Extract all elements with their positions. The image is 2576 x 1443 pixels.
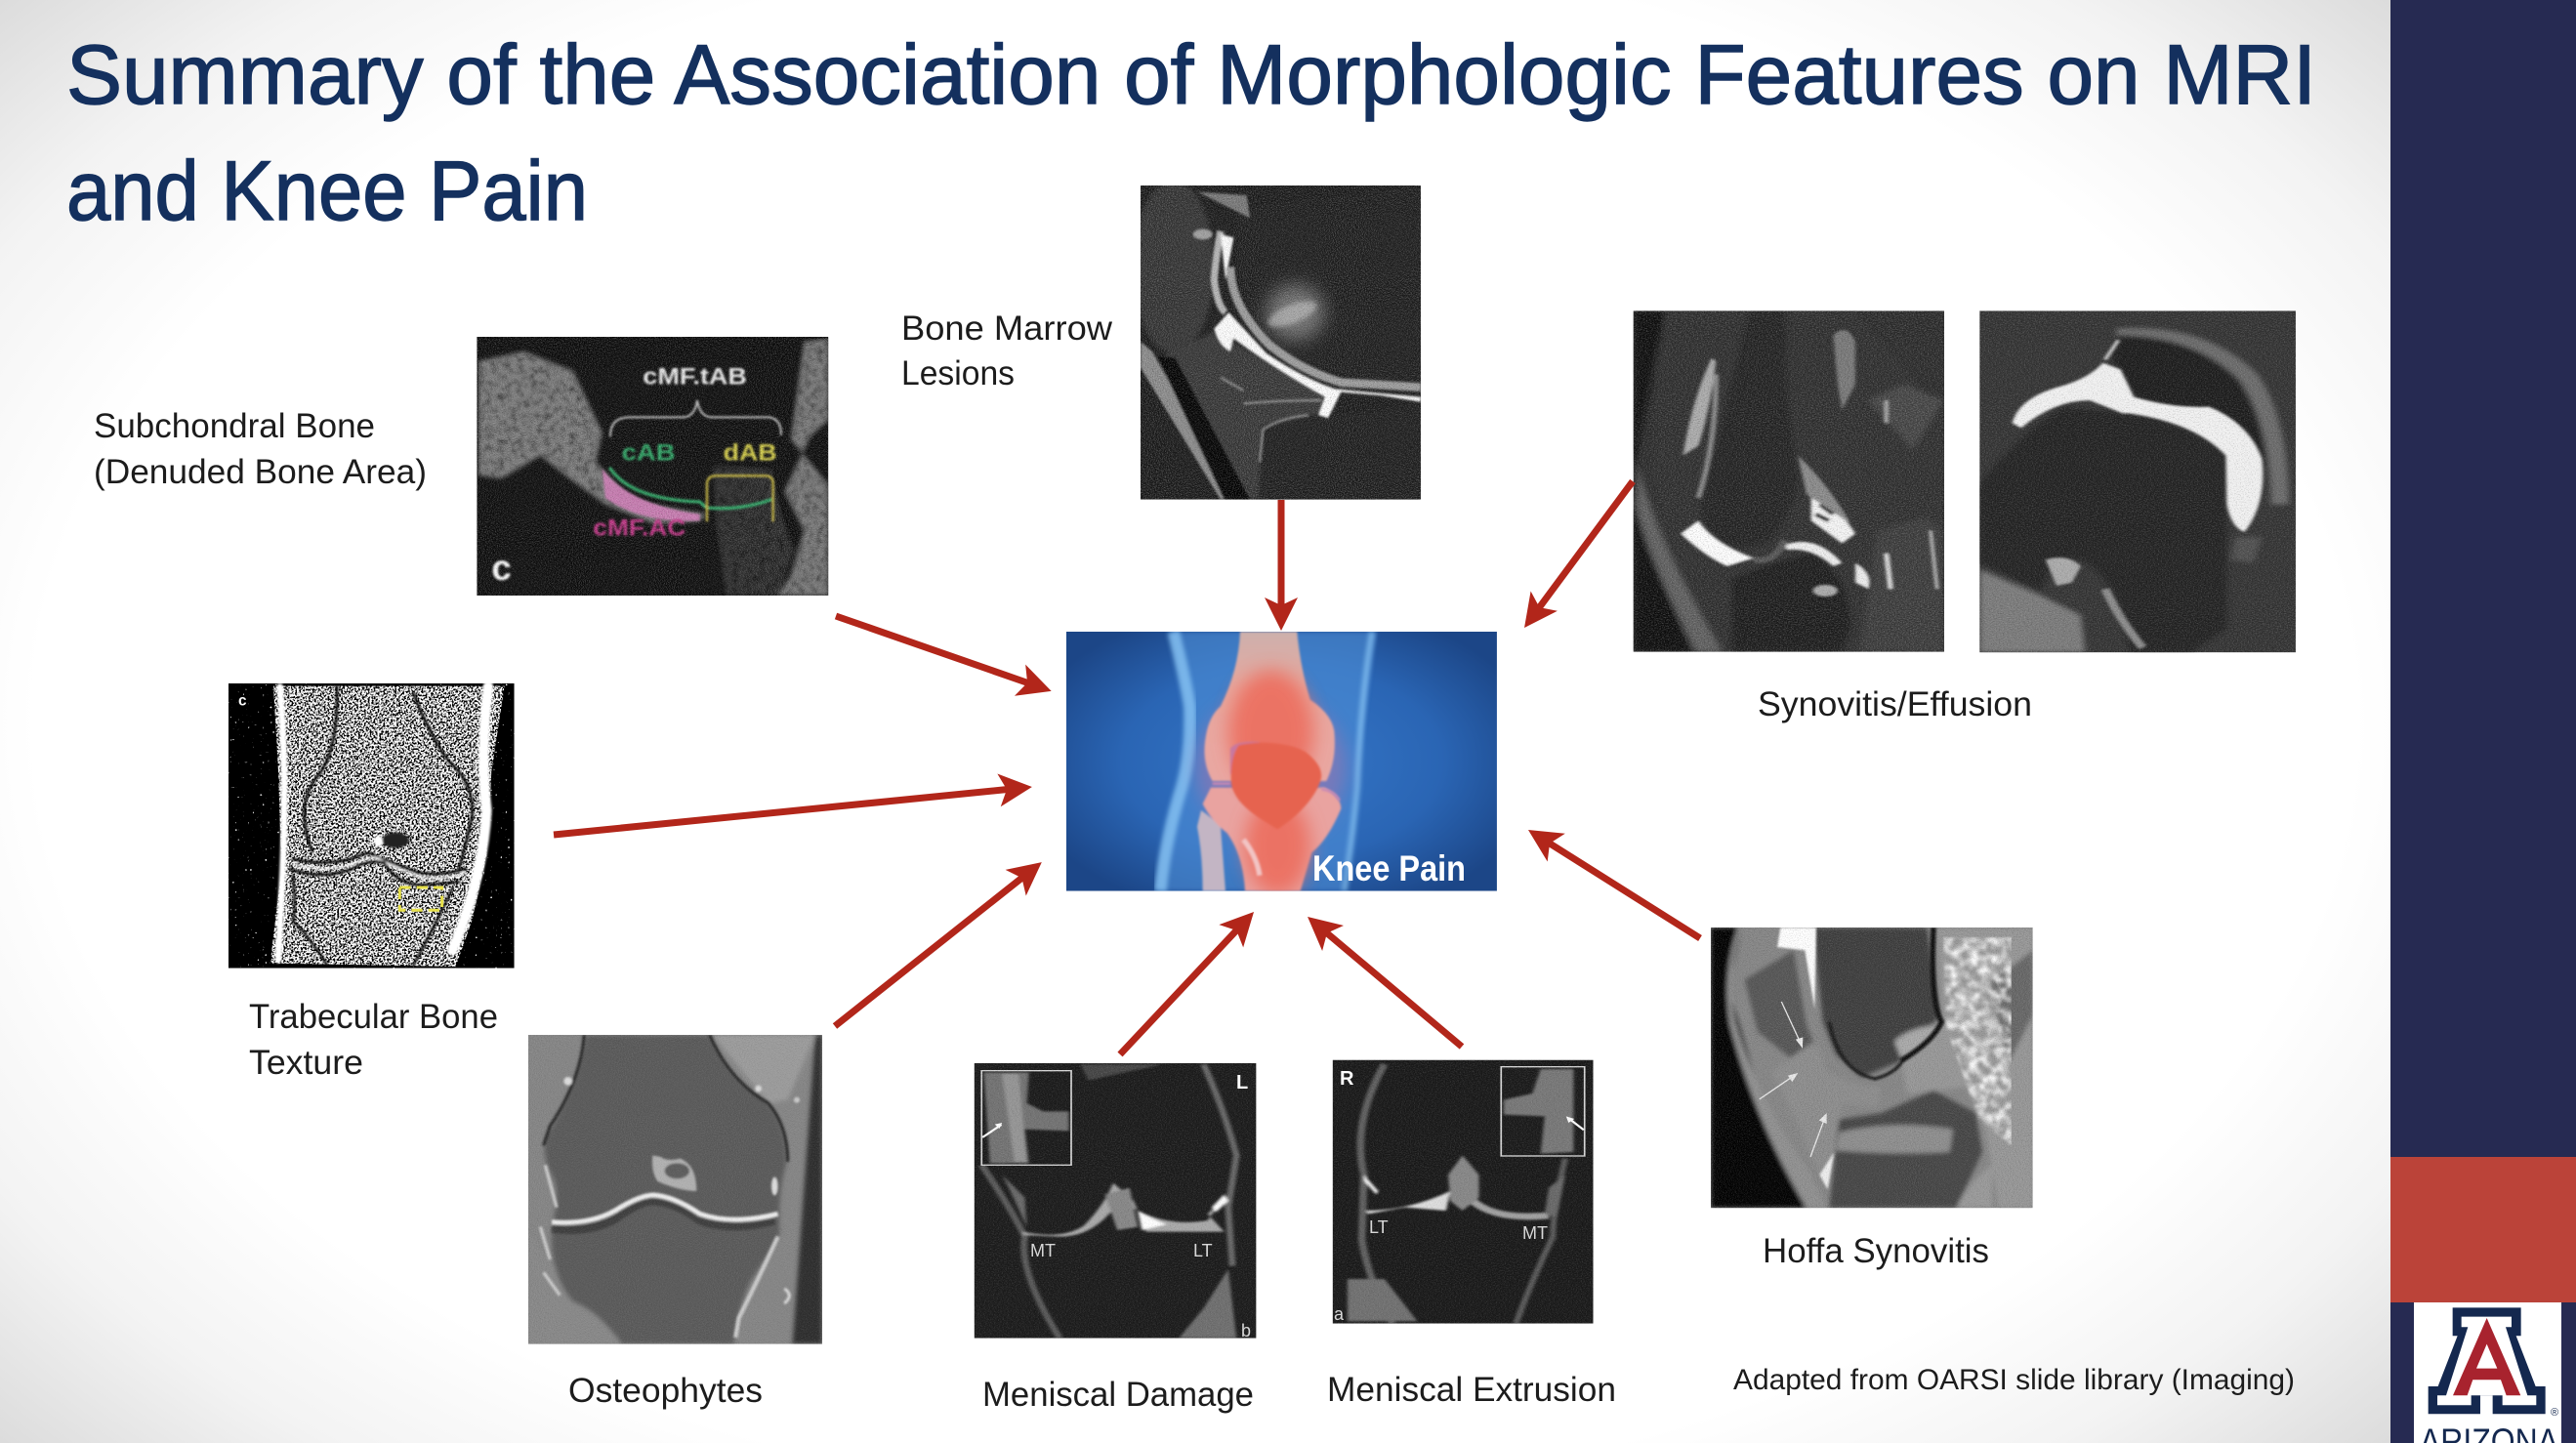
panel: knee pain illustration (1066, 632, 1497, 895)
arrow: trabecular bone to knee pain (554, 770, 1034, 835)
source note: Adapted from OARSI slide library (Imaging) (1733, 1364, 2295, 1396)
panel: meniscal damage MRI: L (1236, 1072, 1248, 1093)
panel: subchondral bone MRI: cMF.tAB (643, 363, 747, 390)
label: trabecular bone texture: Texture (249, 1044, 363, 1082)
panel: meniscal extrusion MRI: R (1340, 1068, 1354, 1090)
label: bone marrow lesions (901, 309, 1113, 392)
arrow: synovitis to knee pain (1511, 481, 1633, 638)
panel: subchondral bone MRI: cAB (622, 440, 676, 467)
arrow: meniscal extrusion to knee pain (1297, 904, 1462, 1047)
panel: bone marrow lesions MRI (1133, 181, 1421, 500)
label: meniscal damage: Meniscal Damage (982, 1376, 1254, 1414)
panel: effusion MRI (1979, 310, 2296, 652)
label: osteophytes: Osteophytes (568, 1372, 763, 1410)
arrows into knee pain (554, 481, 1700, 1054)
panel: meniscal extrusion MRI (1333, 1060, 1594, 1324)
label: trabecular bone texture: Trabecular Bone (249, 998, 498, 1036)
title: and Knee Pain (66, 144, 588, 238)
label: subchondral bone: (Denuded Bone Area) (94, 453, 427, 491)
arrow: meniscal damage to knee pain (1120, 900, 1266, 1054)
label: Knee Pain: Knee Pain (1312, 848, 1466, 888)
logo: University of Arizona (2414, 1302, 2561, 1443)
label: trabecular bone texture (249, 998, 498, 1082)
title: Summary of the Association of Morphologic Features on MRI (66, 28, 2316, 122)
panel: meniscal damage MRI (975, 1063, 1256, 1340)
panel: trabecular bone texture MRI (229, 683, 515, 969)
panel: subchondral bone MRI: c (491, 548, 512, 588)
panel: meniscal damage MRI: MT (1030, 1241, 1056, 1260)
panel: meniscal extrusion MRI: LT (1369, 1217, 1389, 1237)
panel: meniscal extrusion MRI: MT (1522, 1223, 1548, 1243)
panel: meniscal damage MRI: b (1241, 1321, 1251, 1340)
panel: meniscal extrusion MRI: a (1334, 1304, 1345, 1324)
title (66, 28, 2316, 238)
label: subchondral bone (94, 407, 427, 491)
arrow: bone marrow lesions to knee pain (1265, 500, 1298, 631)
label: bone marrow lesions: Lesions (901, 354, 1015, 392)
label: bone marrow lesions: Bone Marrow (901, 309, 1113, 348)
panel: trabecular bone texture MRI: c (238, 693, 247, 710)
arrow: subchondral bone to knee pain (836, 616, 1057, 707)
arrow: osteophytes to knee pain (835, 849, 1052, 1026)
panel: Hoffa synovitis MRI (1711, 928, 2033, 1208)
panel: synovitis MRI (1634, 310, 1944, 652)
logo: University of Arizona: ® (2551, 1407, 2558, 1419)
panel: subchondral bone MRI (477, 337, 828, 596)
label: Hoffa synovitis: Hoffa Synovitis (1763, 1232, 1989, 1270)
arrow: Hoffa synovitis to knee pain (1519, 816, 1700, 938)
panel: meniscal damage MRI: LT (1193, 1241, 1213, 1260)
label: meniscal extrusion: Meniscal Extrusion (1327, 1371, 1616, 1409)
panel: subchondral bone MRI: cMF.AC (593, 515, 686, 541)
right sidebar (2390, 0, 2576, 1443)
label: synovitis/effusion: Synovitis/Effusion (1758, 685, 2032, 723)
panel: subchondral bone MRI: dAB (724, 440, 777, 467)
label: subchondral bone: Subchondral Bone (94, 407, 375, 445)
panel: osteophytes MRI (528, 1035, 822, 1344)
